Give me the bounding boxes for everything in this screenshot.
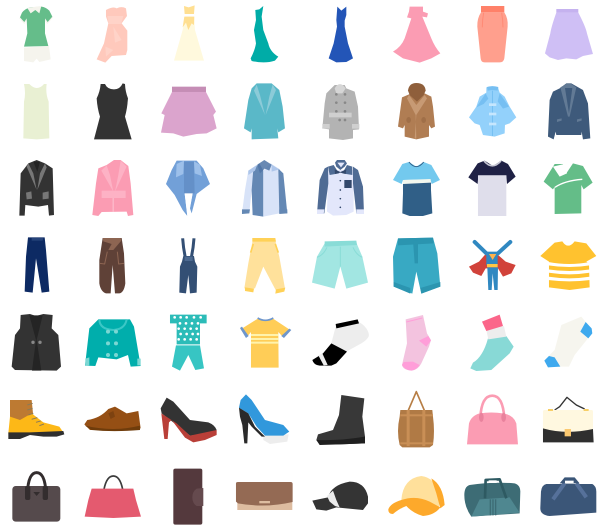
icon: teal blazer	[244, 83, 285, 139]
icon: pink handbag	[467, 396, 518, 444]
icon: black blazer	[19, 160, 54, 216]
icon: peach cocktail dress	[97, 7, 127, 63]
icon: teal denim shorts	[393, 238, 440, 294]
icon: black ankle boot	[316, 395, 365, 445]
icon: tan leather tote bag	[398, 392, 434, 447]
icon: pink tiered skirt	[161, 87, 217, 137]
icon: brown cargo pants	[99, 238, 125, 293]
icon: teal duffel bag	[464, 479, 520, 517]
icon: grey trench coat	[322, 84, 359, 140]
icon: blue mermaid gown	[329, 7, 353, 62]
icon: button-up shirt with bow	[317, 160, 364, 216]
icon: pink blazer	[92, 160, 133, 216]
icon: teal cardigan	[85, 319, 141, 367]
icon: black vest	[12, 314, 61, 371]
icon: blue colour-block tee	[393, 162, 440, 216]
icon: yellow joggers	[244, 238, 285, 294]
icon: navy jeans	[25, 237, 49, 293]
icon: yellow baseball cap	[388, 476, 445, 516]
icon: pink ball gown	[393, 7, 440, 63]
icon: navy blazer	[548, 83, 590, 139]
icon: black baseball cap	[312, 482, 368, 511]
icon: teal mermaid gown	[251, 6, 278, 62]
icon: pink sock	[402, 315, 431, 371]
icon: yellow tee with blue trim	[240, 318, 291, 368]
icon: cream sock with blue toe	[544, 317, 592, 367]
icon: red handbag	[85, 476, 141, 518]
icon: green and white tee	[544, 163, 593, 214]
icon: dark brown wallet	[173, 469, 203, 525]
icon: light blue cape jacket	[469, 86, 516, 137]
icon: navy overalls	[179, 238, 197, 293]
icon: two-tone blue shirt	[242, 160, 287, 217]
icon: cream and black satchel	[543, 397, 594, 442]
icon: mint sock with coral cuff	[470, 315, 514, 371]
icon: blue high heel	[239, 394, 289, 444]
icon: black tank dress	[94, 83, 132, 139]
icon: teal patterned top and capris	[170, 315, 207, 371]
icon: navy and white tee	[468, 161, 516, 216]
icon: yellow work boot	[8, 400, 64, 439]
icon: yellow striped tee	[540, 241, 596, 290]
icon: lavender skirt	[545, 9, 593, 60]
icon: cream gown	[174, 5, 204, 61]
icon: dark grey laptop bag	[12, 473, 60, 522]
icon: coral pencil skirt	[477, 6, 508, 62]
icon: brown clutch purse	[236, 482, 293, 510]
icon: denim shawl top	[166, 161, 210, 216]
icon: black and red high heel	[161, 398, 217, 442]
icon: navy duffel bag	[540, 477, 596, 516]
icon: brown fur-collar coat	[398, 83, 435, 139]
icon: brown oxford shoe	[84, 407, 141, 431]
icon: superhero costume	[469, 242, 516, 290]
icon: mint shorts	[312, 241, 368, 289]
icon: green dress with white shorts	[19, 6, 53, 62]
icon: pale green sleeveless dress	[23, 84, 49, 139]
icon: black and white ankle sock	[312, 319, 369, 366]
